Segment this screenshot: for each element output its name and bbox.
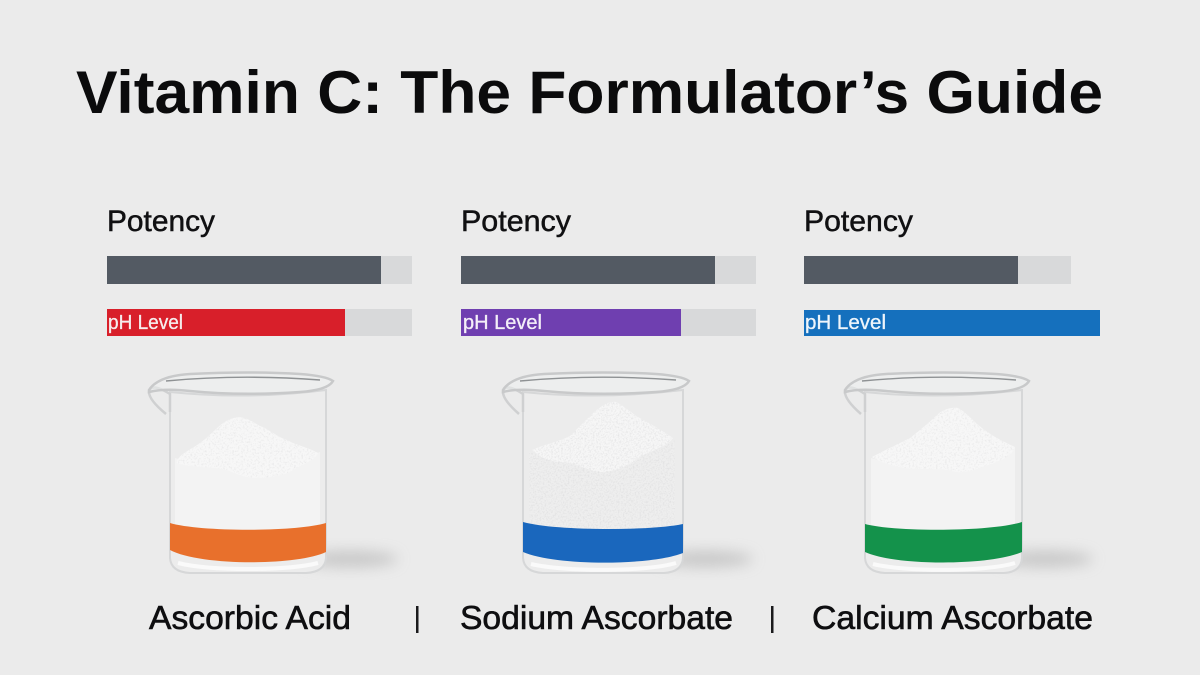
panel: calcium ascorbate bars bbox=[804, 205, 1100, 336]
potency bar bbox=[804, 256, 1071, 284]
potency label: Potency bbox=[804, 205, 913, 238]
pH bar bbox=[804, 310, 1100, 336]
potency bar bbox=[461, 256, 756, 284]
potency bar bbox=[107, 256, 412, 284]
potency label: Potency bbox=[107, 205, 215, 238]
icon: beaker with orange band bbox=[149, 372, 398, 573]
pH bar: pH Level bbox=[463, 312, 542, 334]
pH bar bbox=[107, 309, 412, 336]
title: Vitamin C: The Formulator’s Guide bbox=[76, 59, 1103, 126]
label: Sodium Ascorbate: Sodium Ascorbate bbox=[460, 599, 733, 636]
label: Ascorbic Acid: Ascorbic Acid bbox=[149, 599, 351, 636]
pH bar bbox=[461, 309, 756, 336]
icon: beaker with green band bbox=[845, 372, 1093, 573]
icon: beaker with blue band bbox=[503, 372, 753, 573]
separator bbox=[771, 606, 774, 633]
label: Calcium Ascorbate: Calcium Ascorbate bbox=[812, 599, 1093, 636]
pH bar: pH Level bbox=[108, 312, 183, 334]
pH bar: pH Level bbox=[805, 312, 886, 334]
panel: sodium ascorbate bars bbox=[461, 205, 756, 336]
panel: ascorbic acid bars bbox=[107, 205, 412, 336]
separator bbox=[416, 606, 418, 633]
potency label: Potency bbox=[461, 205, 571, 238]
